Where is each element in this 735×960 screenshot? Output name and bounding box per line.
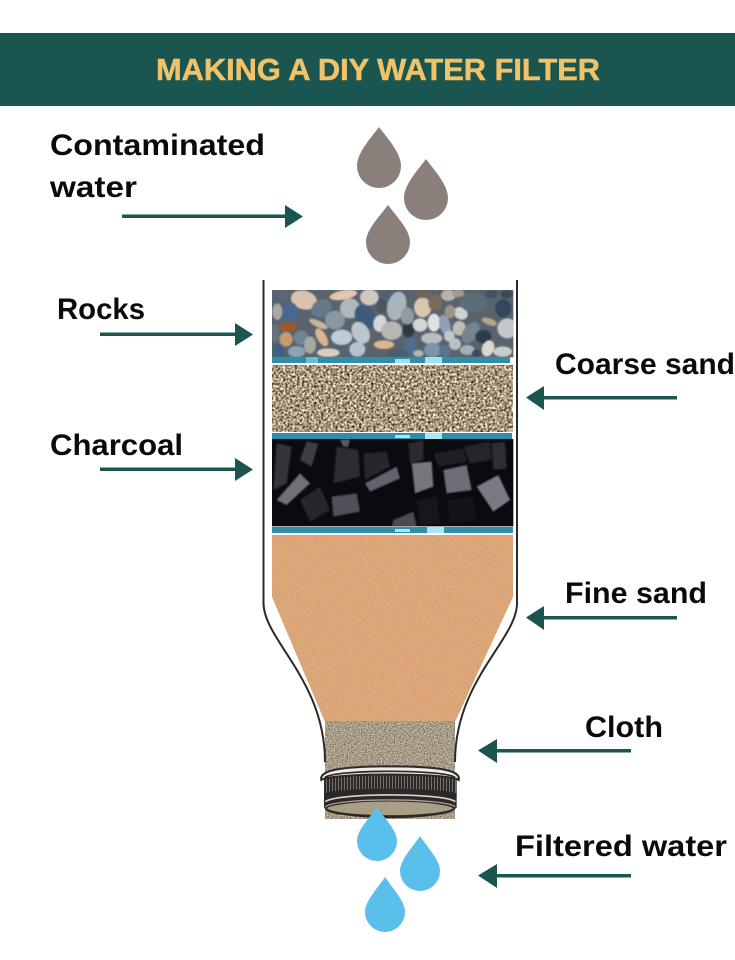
label: contaminated water: water bbox=[49, 171, 137, 204]
blue divider 1 bbox=[272, 357, 510, 363]
contaminated water drops bbox=[357, 127, 448, 264]
label: contaminated water: Contaminated bbox=[50, 129, 265, 162]
cloth bbox=[325, 721, 455, 819]
label: rocks: Rocks bbox=[57, 293, 145, 326]
filter layers bbox=[271, 288, 517, 819]
rocks layer bbox=[271, 288, 517, 358]
title: MAKING A DIY WATER FILTER bbox=[156, 52, 600, 87]
filtered water drops bbox=[357, 807, 440, 932]
label: charcoal: Charcoal bbox=[50, 429, 183, 462]
arrow: fine sand bbox=[526, 606, 677, 630]
arrow: contaminated water bbox=[122, 205, 303, 228]
blue divider 2 bbox=[272, 433, 512, 439]
blue divider 3 bbox=[272, 527, 513, 533]
charcoal layer bbox=[272, 439, 513, 526]
bottle outline bbox=[264, 280, 517, 762]
arrow: cloth bbox=[478, 739, 631, 763]
arrow: charcoal bbox=[100, 458, 253, 481]
label: filtered water: Filtered water bbox=[515, 830, 727, 863]
label: cloth: Cloth bbox=[585, 711, 663, 744]
arrow: coarse sand bbox=[526, 386, 677, 410]
label: coarse sand: Coarse sand bbox=[555, 348, 735, 381]
bottle cap bbox=[321, 766, 459, 818]
coarse sand layer bbox=[272, 365, 513, 432]
arrow: filtered water bbox=[478, 864, 631, 888]
arrow: rocks bbox=[100, 323, 253, 346]
label: fine sand: Fine sand bbox=[565, 577, 707, 610]
label: contaminated water bbox=[49, 129, 265, 204]
fine sand layer bbox=[272, 535, 513, 722]
title banner bbox=[0, 33, 735, 106]
